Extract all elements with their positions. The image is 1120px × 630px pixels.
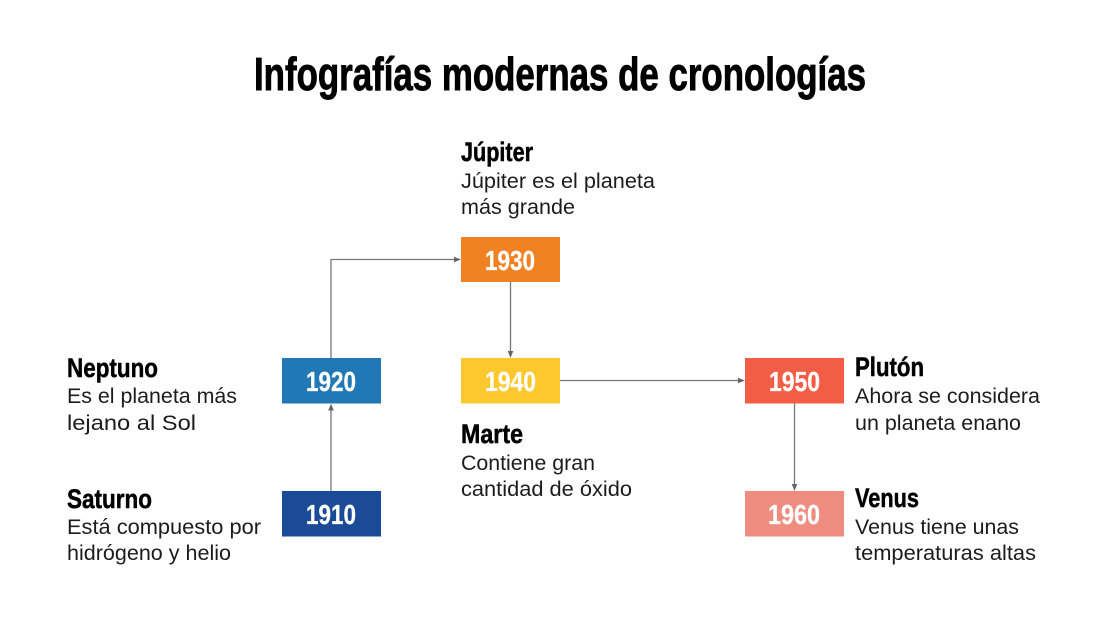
timeline box: 1910: 1910	[306, 499, 356, 530]
text block: Júpiter	[461, 137, 655, 219]
text block: Saturno: hidrógeno y helio	[67, 541, 231, 565]
text block: Saturno: Saturno	[67, 484, 152, 514]
timeline box: 1920	[282, 358, 381, 404]
text block: Venus	[855, 483, 1036, 565]
text block: Neptuno: Es el planeta más	[67, 384, 237, 408]
timeline box: 1920: 1920	[306, 366, 356, 397]
text block: Plutón: Plutón	[855, 352, 924, 382]
arrow: 1920 to 1930	[331, 257, 461, 358]
text block: Júpiter: Júpiter	[461, 137, 533, 167]
text block: Saturno	[67, 484, 261, 565]
text block: Neptuno	[67, 353, 237, 435]
timeline box: 1950	[745, 358, 844, 404]
timeline box: 1950: 1950	[769, 366, 820, 397]
text block: Plutón	[855, 352, 1040, 435]
text block: Venus: Venus	[855, 483, 919, 513]
timeline box: 1960	[745, 491, 844, 536]
timeline box: 1940	[461, 358, 560, 404]
text block: Plutón: Ahora se considera	[855, 384, 1040, 408]
arrow: 1940 to 1950	[560, 378, 745, 383]
text block: Marte	[461, 419, 632, 501]
timeline box: 1930: 1930	[485, 245, 535, 276]
text block: Marte: Marte	[461, 419, 523, 449]
text block: Neptuno: lejano al Sol	[67, 411, 196, 435]
arrow: 1930 to 1940	[508, 282, 513, 358]
timeline box: 1940: 1940	[485, 366, 536, 397]
arrow: 1950 to 1960	[792, 404, 797, 491]
text block: Júpiter: más grande	[461, 195, 575, 219]
timeline box: 1930	[461, 237, 560, 282]
text block: Júpiter: Júpiter es el planeta	[461, 169, 655, 193]
arrow: 1910 to 1920	[328, 404, 334, 491]
text block: Marte: Contiene gran	[461, 451, 595, 475]
text block: Neptuno: Neptuno	[67, 353, 158, 383]
title: Infografías modernas de cronologías	[254, 48, 866, 100]
text block: Plutón: un planeta enano	[855, 411, 1021, 435]
text block: Venus: temperaturas altas	[855, 541, 1036, 565]
text block: Venus: Venus tiene unas	[855, 515, 1019, 539]
timeline box: 1960: 1960	[768, 499, 820, 530]
timeline box: 1910	[282, 491, 381, 536]
text block: Saturno: Está compuesto por	[67, 515, 261, 539]
text block: Marte: cantidad de óxido	[461, 477, 632, 501]
